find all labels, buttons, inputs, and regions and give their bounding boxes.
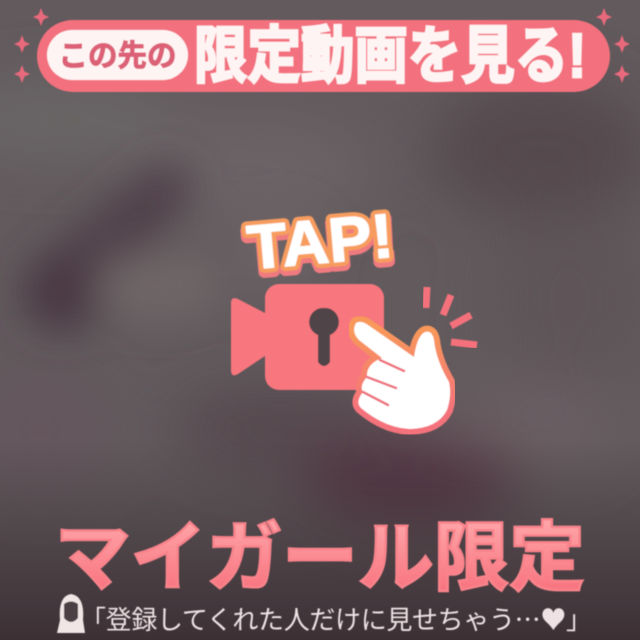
TAP label: TAP! <box>244 202 396 283</box>
icon: locked video camera <box>231 284 384 390</box>
icon: girl avatar <box>57 594 85 633</box>
sparkles left <box>14 8 49 83</box>
TAP label: TAP! <box>244 202 396 283</box>
top banner <box>37 20 610 92</box>
banner pill <box>37 20 610 92</box>
TAP label: TAP! <box>245 206 396 287</box>
caption text: 「登録してくれた人だけに見せちゃう…♥」 <box>80 600 592 637</box>
sparkles right <box>596 8 630 83</box>
icon: keyhole <box>309 308 339 366</box>
white label pill: この先の <box>58 40 176 73</box>
bottom heading: マイガール限定 <box>55 516 585 601</box>
icon: tap motion lines <box>426 287 477 345</box>
icon: tapping hand <box>354 322 450 429</box>
banner headline: 限定動画を見る! <box>194 22 586 91</box>
white label pill <box>47 30 188 80</box>
bottom caption <box>57 594 592 637</box>
